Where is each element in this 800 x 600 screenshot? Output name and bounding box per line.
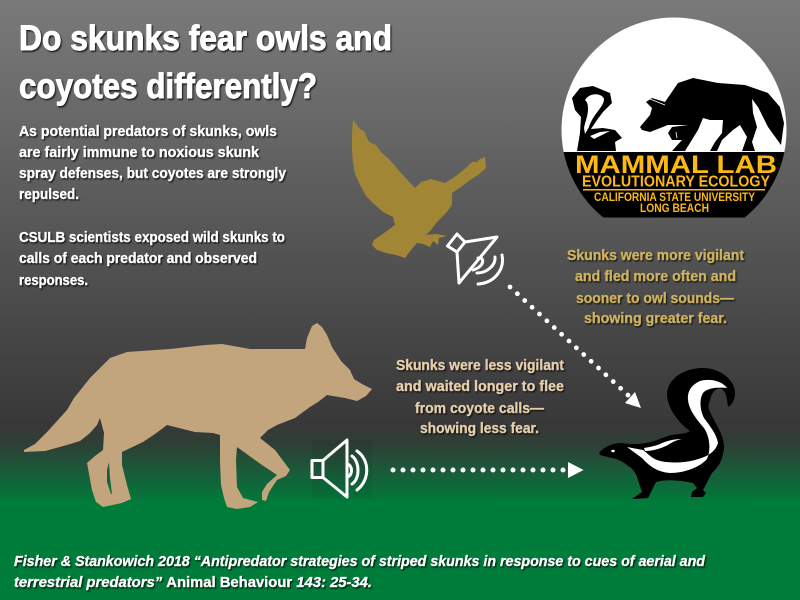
coyote finding text: Skunks were less vigilant: [396, 358, 564, 374]
owl finding text: [567, 248, 744, 327]
intro text block: calls of each predator and observed: [19, 251, 257, 267]
icon: owl speaker: [448, 234, 502, 284]
intro text block: CSULB scientists exposed wild skunks to: [19, 230, 285, 246]
owl finding text: and fled more often and: [575, 269, 736, 285]
logo: Mammal Lab badge: [560, 16, 790, 218]
intro text block: [19, 124, 286, 289]
logo coyote silhouette: [640, 78, 784, 151]
title: Do skunks fear owls and: [19, 19, 392, 58]
logo text: EVOLUTIONARY ECOLOGY: [582, 174, 771, 190]
logo text: CALIFORNIA STATE UNIVERSITY: [594, 192, 755, 204]
icon: coyote silhouette: [24, 323, 372, 509]
icon: coyote speaker: [312, 440, 372, 498]
coyote finding text: and waited longer to flee: [396, 379, 564, 395]
title: [19, 19, 392, 106]
logo text: LONG BEACH: [640, 203, 709, 215]
intro text block: repulsed.: [19, 187, 79, 203]
owl finding text: sooner to owl sounds—: [576, 291, 734, 307]
logo text: [576, 156, 776, 212]
icon: skunk: [599, 368, 735, 499]
icon: owl silhouette: [352, 120, 486, 258]
citation: Fisher & Stankowich 2018 “Antipredator strategies of striped skunks in response to cues of aerial and: [14, 554, 706, 570]
citation: [14, 554, 706, 591]
intro text block: spray defenses, but coyotes are strongly: [19, 166, 286, 182]
coyote finding text: [396, 358, 564, 437]
intro text block: are fairly immune to noxious skunk: [19, 145, 260, 161]
intro text block: responses.: [19, 273, 88, 289]
coyote finding text: showing less fear.: [420, 421, 539, 437]
logo text: MAMMAL LAB: [575, 151, 777, 179]
citation: terrestrial predators” Animal Behaviour 143: 25-34.: [14, 575, 372, 591]
intro text block: As potential predators of skunks, owls: [19, 124, 277, 140]
owl finding text: Skunks were more vigilant: [567, 248, 744, 264]
coyote finding text: from coyote calls—: [415, 401, 544, 417]
arrow: coyote call to skunk: [393, 462, 584, 478]
arrow: owl call to skunk: [510, 287, 641, 408]
logo skunk silhouette: [572, 86, 622, 151]
owl finding text: showing greater fear.: [584, 311, 727, 327]
title: coyotes differently?: [19, 67, 317, 106]
